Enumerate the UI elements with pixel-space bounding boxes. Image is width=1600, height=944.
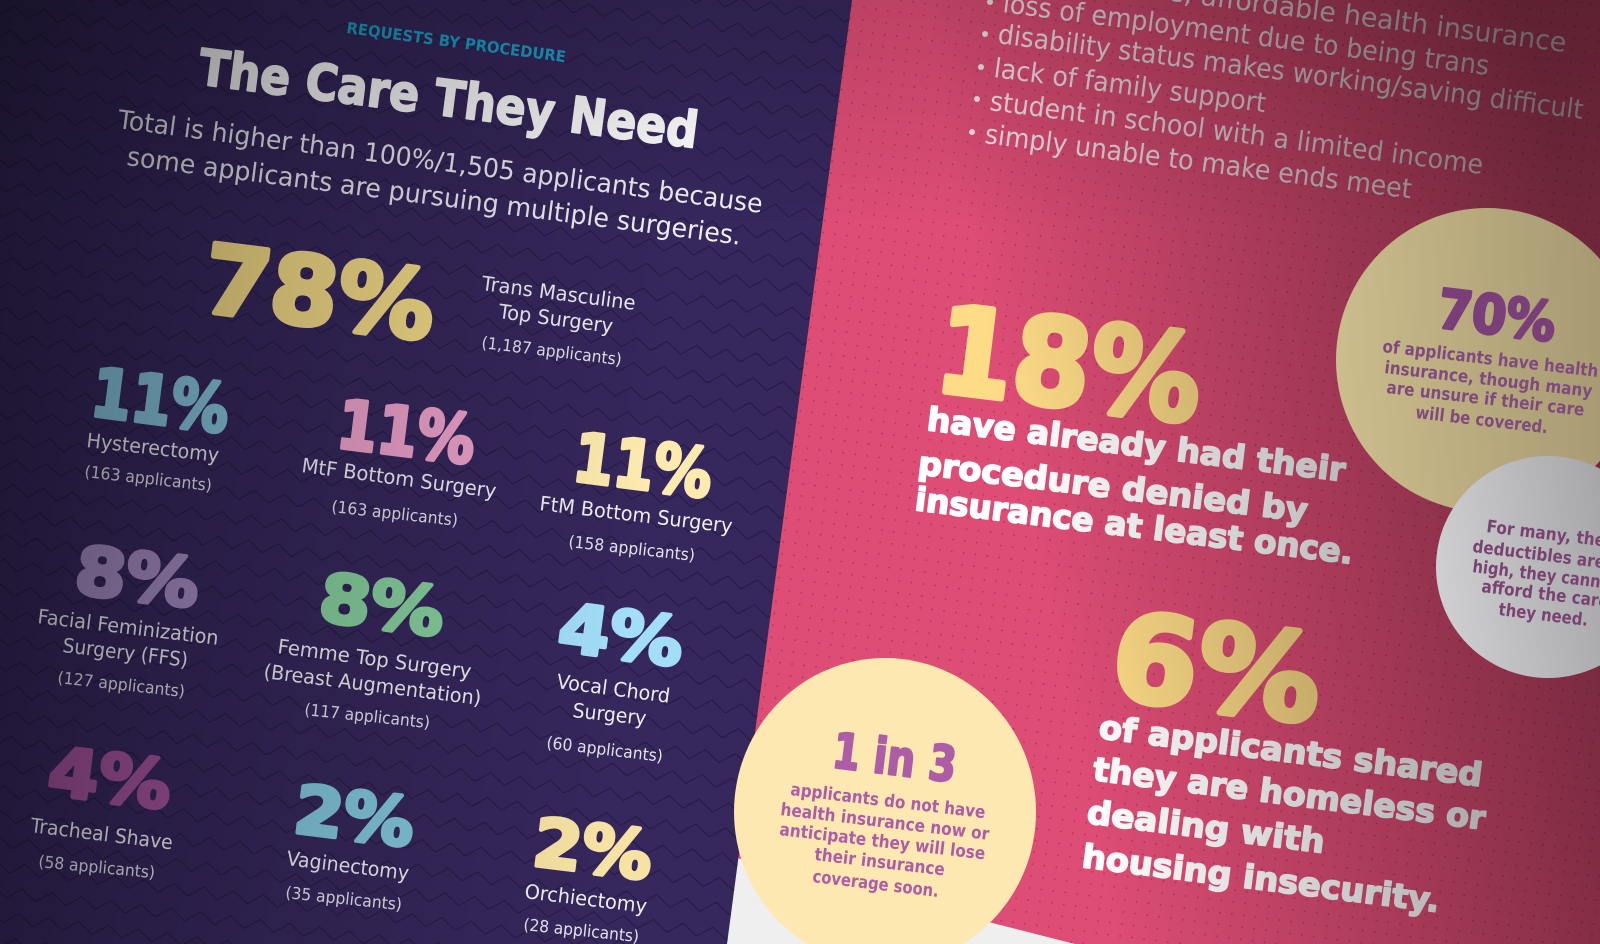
stat: 11% MtF bottom surgery: (163 applicants) bbox=[331, 497, 459, 530]
intro text: Total is higher than 100%/1,505 applicants because bbox=[115, 105, 764, 220]
stat: 8% femme top surgery: 8% bbox=[315, 559, 449, 652]
stat: 4% vocal chord surgery: Surgery bbox=[571, 698, 648, 730]
stat: 8% femme top surgery: (117 applicants) bbox=[304, 700, 431, 732]
stat: 11% MtF bottom surgery bbox=[300, 385, 498, 530]
stat: 18% denied by insurance bbox=[913, 281, 1355, 572]
stat: 78% trans masculine top surgery: Trans Masculine bbox=[479, 271, 637, 315]
stat: 4% tracheal shave: (58 applicants) bbox=[38, 852, 156, 882]
stat: 11% FtM bottom surgery: (158 applicants) bbox=[568, 532, 696, 565]
panel: insurance and finances (pink) bbox=[720, 0, 1600, 944]
stat: 8% facial feminization surgery: (127 applicants) bbox=[57, 668, 186, 701]
stat: 18% denied by insurance: have already had their bbox=[925, 400, 1348, 489]
title: The Care They Need bbox=[195, 38, 702, 160]
stat: 2% vaginectomy: (35 applicants) bbox=[285, 883, 403, 914]
stat: 2% orchiectomy bbox=[523, 803, 657, 944]
stat: 18% denied by insurance: insurance at least once. bbox=[913, 480, 1355, 572]
bullet list: financial barriers: simply unable to make ends meet bbox=[983, 119, 1414, 205]
stat: 8% facial feminization surgery: 8% bbox=[71, 531, 203, 623]
stat: 18% denied by insurance: 18% bbox=[928, 281, 1209, 451]
stat: 11% MtF bottom surgery: MtF Bottom Surgery bbox=[300, 453, 498, 503]
stat: 11% hysterectomy bbox=[84, 354, 234, 495]
bullet list: financial barriers: student in school with a limited income bbox=[988, 86, 1485, 181]
stat: 78% trans masculine top surgery bbox=[197, 225, 637, 369]
bullet list: financial barriers: lack of family support bbox=[992, 53, 1268, 119]
circle callout: 1 in 3 without insurance: health insurance now or bbox=[779, 800, 991, 845]
eyebrow label: REQUESTS BY PROCEDURE bbox=[345, 19, 567, 66]
stat: 2% orchiectomy: 2% bbox=[529, 803, 657, 895]
stat: 2% vaginectomy: 2% bbox=[290, 770, 419, 863]
stat: 8% femme top surgery: Femme Top Surgery bbox=[276, 634, 473, 683]
stat: 11% hysterectomy: 11% bbox=[87, 354, 234, 449]
stat: 4% tracheal shave: 4% bbox=[44, 732, 176, 825]
stat: 8% facial feminization surgery bbox=[36, 531, 220, 701]
circle callout: 70% have insurance bbox=[1336, 208, 1600, 512]
circle callout: 70% have insurance: will be covered. bbox=[1414, 403, 1549, 438]
stat: 78% trans masculine top surgery: 78% bbox=[197, 225, 441, 363]
stat: 11% FtM bottom surgery bbox=[538, 419, 734, 565]
stat: 8% facial feminization surgery: Surgery (FFS) bbox=[61, 633, 189, 672]
stat: 8% femme top surgery bbox=[262, 559, 483, 732]
intro text: some applicants are pursuing multiple surgeries. bbox=[125, 142, 743, 252]
stat: 78% trans masculine top surgery: Top Surgery bbox=[496, 299, 615, 338]
stat: 11% FtM bottom surgery: FtM Bottom Surgery bbox=[538, 491, 734, 538]
stat: 11% FtM bottom surgery: 11% bbox=[569, 419, 717, 514]
stat: 11% MtF bottom surgery: 11% bbox=[333, 385, 480, 480]
stat: 4% vocal chord surgery bbox=[546, 589, 688, 766]
stat: 8% femme top surgery: (Breast Augmentation) bbox=[262, 659, 483, 710]
stat: 4% vocal chord surgery: Vocal Chord bbox=[555, 669, 672, 708]
stat: 6% homeless or housing insecure: of applicants shared bbox=[1097, 708, 1485, 794]
stat: 4% vocal chord surgery: 4% bbox=[554, 589, 688, 682]
stat: 11% hysterectomy: Hysterectomy bbox=[85, 428, 220, 467]
circle callout: 1 in 3 without insurance: 1 in 3 bbox=[830, 722, 960, 794]
stat: 11% hysterectomy: (163 applicants) bbox=[84, 462, 213, 495]
circle callout: 1 in 3 without insurance: anticipate they will lose bbox=[778, 820, 986, 864]
stat: 6% homeless or housing insecure bbox=[1080, 588, 1488, 920]
stat: 6% homeless or housing insecure: they are homeless or bbox=[1091, 750, 1488, 837]
panel: requests by procedure (purple) bbox=[0, 0, 852, 944]
stat: 6% homeless or housing insecure: 6% bbox=[1104, 588, 1329, 751]
stat: 18% denied by insurance: procedure denied by bbox=[916, 444, 1310, 530]
stat: 4% tracheal shave bbox=[28, 732, 176, 882]
circle callout: deductibles too high bbox=[1436, 456, 1600, 678]
stat: 4% tracheal shave: Tracheal Shave bbox=[28, 813, 174, 854]
circle callout: 1 in 3 without insurance: applicants do not have bbox=[789, 780, 986, 823]
stat: 6% homeless or housing insecure: housing insecurity. bbox=[1080, 837, 1442, 920]
stat: 2% vaginectomy: Vaginectomy bbox=[285, 846, 411, 885]
circle callout: 1 in 3 without insurance bbox=[734, 658, 1036, 944]
bullet list: financial barriers bbox=[969, 0, 1585, 205]
stat: 8% facial feminization surgery: Facial Feminization bbox=[36, 604, 220, 650]
circle callout: 1 in 3 without insurance: their insurance bbox=[813, 845, 946, 880]
circle callout: 1 in 3 without insurance: coverage soon. bbox=[811, 867, 940, 902]
stat: 6% homeless or housing insecure: dealing with bbox=[1085, 793, 1327, 861]
stat: 2% vaginectomy bbox=[285, 770, 419, 914]
stat: 78% trans masculine top surgery: (1,187 applicants) bbox=[481, 333, 623, 369]
circle callout: 70% have insurance: 70% bbox=[1434, 277, 1559, 354]
stat: 4% vocal chord surgery: (60 applicants) bbox=[546, 733, 664, 766]
stat: 2% orchiectomy: Orchiectomy bbox=[523, 879, 649, 918]
